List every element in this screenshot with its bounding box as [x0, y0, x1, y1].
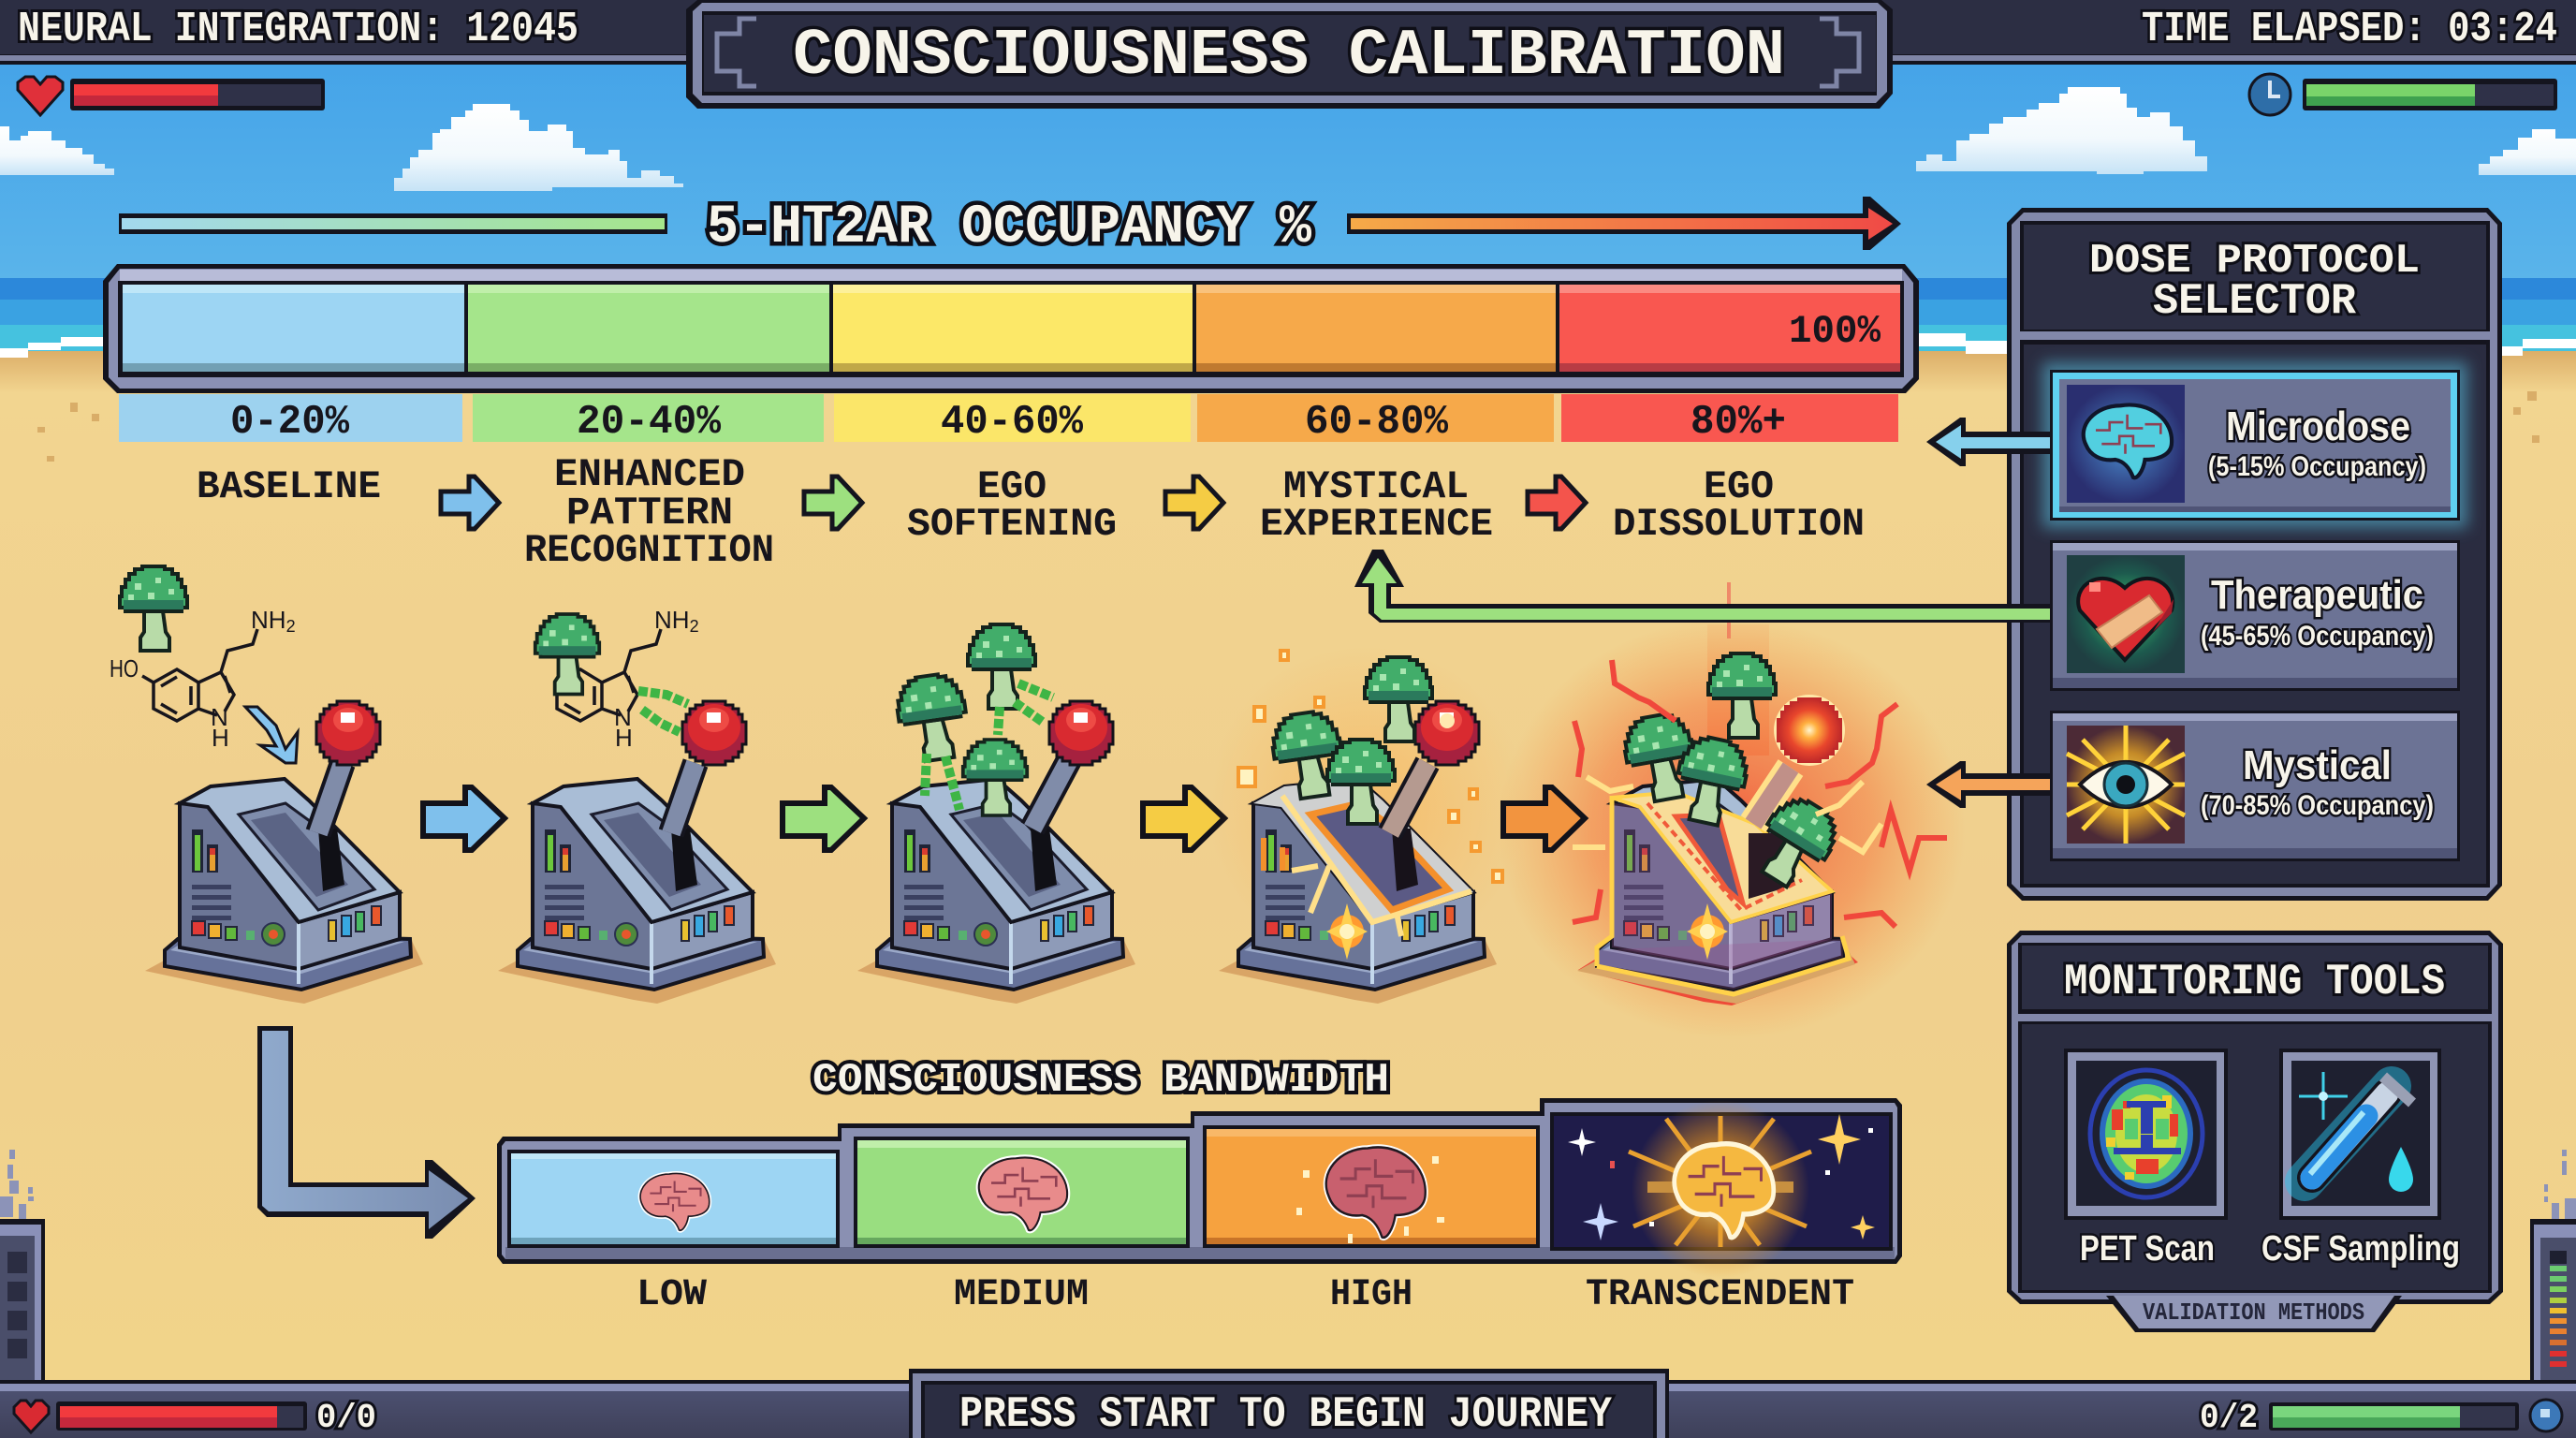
spark: [1687, 903, 1728, 960]
lightning: [1573, 660, 1947, 927]
transcendent: TRANSCENDENT: [1586, 1274, 1854, 1316]
ego softening: SOFTENING: [907, 502, 1117, 547]
bar: [70, 79, 325, 110]
range labels: [119, 394, 1898, 446]
arrow: label yellow: [1165, 477, 1223, 529]
machine: [1219, 779, 1497, 1004]
mushrooms: [1268, 657, 1432, 824]
range 80+: 80%+: [1690, 399, 1786, 446]
mushrooms: [1620, 653, 1847, 896]
mystical experience: MYSTICAL: [1283, 464, 1469, 509]
serotonin with binding: 2: [690, 617, 699, 636]
segment green: [468, 285, 829, 372]
bottom HUD bar: [0, 1380, 2576, 1438]
icon: mushroom: [535, 614, 599, 695]
tile medium: [854, 1137, 1190, 1248]
stage labels: [197, 452, 1865, 573]
score left: 0/0: [316, 1399, 376, 1437]
cloud right edge: [2479, 129, 2576, 175]
press start text: PRESS START TO BEGIN JOURNEY: [959, 1390, 1612, 1438]
spark: [1326, 903, 1368, 960]
range 20-40: [473, 394, 824, 446]
stage 2: enhanced pattern machine: [498, 606, 776, 1004]
panel title: MONITORING TOOLS: [2064, 958, 2445, 1006]
arrow: label blue: [441, 477, 499, 529]
stage 3: ego softening machine: [857, 624, 1135, 1004]
stage 1: baseline machine: [110, 566, 423, 1004]
arrow: stage 2 to 3: [783, 787, 864, 850]
bar: [2303, 79, 2557, 110]
serotonin molecule: 2: [286, 617, 296, 636]
time bar top-right: [2249, 74, 2557, 115]
serotonin molecule: N: [211, 703, 228, 731]
neural integration score: NEURAL INTEGRATION: 12045: [18, 6, 578, 53]
score right: 0/2: [2200, 1399, 2258, 1437]
floating sparks: [1238, 651, 1502, 882]
label: PET Scan: [2080, 1229, 2215, 1269]
serotonin with binding: H: [615, 724, 633, 752]
button: therapeutic: [2050, 540, 2460, 691]
icon: orb: [2530, 1400, 2562, 1431]
range 40-60: [834, 394, 1191, 446]
machine: [145, 779, 423, 1004]
segment blue: [123, 285, 464, 372]
range 0-20: [119, 394, 462, 446]
icon: cyan brain: [2067, 385, 2185, 503]
lever: [1753, 695, 1845, 824]
tile high: [1203, 1125, 1540, 1248]
panel title: [2089, 238, 2420, 326]
icon: test tube: [2299, 1072, 2413, 1192]
enhanced pattern recognition: RECOGNITION: [524, 528, 774, 573]
arrow: curved blue: [245, 707, 298, 763]
high: HIGH: [1330, 1274, 1412, 1316]
icon: medium brain: [979, 1157, 1067, 1230]
serotonin molecule: NH: [251, 606, 286, 634]
arrow: stage 4 to 5: [1503, 787, 1585, 850]
arrow: mystical to occupancy: [1926, 761, 2050, 808]
icon: radiant eye: [2067, 726, 2185, 844]
label: Therapeutic: [2211, 572, 2423, 618]
arrow: stage 1 to 2: [423, 787, 505, 850]
occupancy axis: [119, 197, 1901, 258]
lever: [1390, 701, 1479, 833]
cloud right main: [1916, 87, 2207, 174]
validation tab: VALIDATION METHODS: [2143, 1299, 2364, 1327]
label: [2201, 572, 2434, 652]
low: LOW: [637, 1274, 707, 1316]
serotonin with binding: NH: [654, 606, 690, 634]
button: mystical: [2050, 711, 2460, 861]
bandwidth labels: [637, 1274, 1854, 1316]
ego softening: [907, 464, 1117, 547]
lever: [316, 701, 380, 833]
serotonin molecule: H: [212, 724, 229, 752]
lever: [671, 701, 746, 833]
tile low: [507, 1150, 840, 1248]
machine: [857, 779, 1135, 1004]
mystical experience: EXPERIENCE: [1260, 502, 1493, 547]
medium: MEDIUM: [954, 1274, 1089, 1316]
consciousness bandwidth title: CONSCIOUSNESS BANDWIDTH: [812, 1057, 1389, 1104]
tool: PET scan: [2064, 1049, 2228, 1269]
arrow: label green: [804, 477, 862, 529]
icon: radiant brain: [1629, 1100, 1811, 1278]
left side device: [0, 1150, 45, 1382]
baseline: BASELINE: [197, 464, 381, 509]
axis title: 5-HT2AR OCCUPANCY %: [707, 198, 1311, 258]
range 40-60: 40-60%: [941, 399, 1084, 446]
ego softening: EGO: [977, 464, 1046, 509]
serotonin molecule: [110, 606, 296, 752]
range 60-80: [1197, 394, 1554, 446]
energy overlay: [1253, 779, 1473, 936]
icon: mushroom: [120, 566, 187, 651]
label: CSF Sampling: [2261, 1229, 2460, 1269]
title panel: [686, 0, 1893, 109]
ego dissolution: EGO: [1704, 464, 1774, 509]
100 percent label: 100%: [1789, 309, 1881, 354]
serotonin with binding: [557, 606, 699, 752]
cloud left main: [394, 104, 683, 191]
icon: large brain: [1326, 1147, 1426, 1238]
panel title: DOSE PROTOCOL: [2089, 238, 2420, 285]
button: microdose: [2042, 362, 2467, 528]
mushrooms: [893, 624, 1035, 815]
bandwidth stepped meter: [497, 1098, 1902, 1278]
health bar top-left: [18, 77, 325, 115]
icon: bandaged heart: [2067, 555, 2185, 673]
arrow: label red: [1528, 477, 1586, 529]
arrow: machine to bandwidth: [257, 1026, 476, 1239]
range 0-20: 0-20%: [230, 399, 350, 446]
enhanced pattern recognition: [524, 452, 774, 573]
label: [2201, 742, 2434, 821]
icon: small brain: [640, 1173, 710, 1230]
press start panel: [909, 1369, 1669, 1438]
arrow: microdose to occupancy: [1926, 418, 2050, 466]
background: sea and beach: [0, 278, 2576, 1386]
dose protocol selector panel: [2007, 208, 2502, 901]
segment orange: [1196, 285, 1556, 372]
axis right arrow: [1347, 197, 1901, 250]
icon: heart: [14, 1401, 49, 1432]
stage 5: ego dissolution machine: [1573, 653, 1947, 1005]
segment red: [1559, 285, 1900, 372]
title text: CONSCIOUSNESS CALIBRATION: [793, 20, 1785, 94]
panel title: SELECTOR: [2153, 277, 2356, 326]
enhanced pattern recognition: ENHANCED: [554, 452, 745, 497]
serotonin with binding: N: [614, 703, 632, 731]
tile transcendent: [1550, 1100, 1893, 1278]
green binding chains: [925, 683, 1053, 810]
health bar: [56, 1401, 307, 1431]
right side device: [2530, 1150, 2576, 1382]
occupancy gauge: [103, 264, 1919, 393]
green binding chain: [638, 691, 688, 732]
validation tab: [2106, 1296, 2402, 1332]
machine: [498, 779, 776, 1004]
label: Microdose: [2226, 404, 2410, 449]
icon: PET brain: [2090, 1070, 2203, 1197]
serotonin molecule: HO: [110, 654, 139, 682]
label: Mystical: [2243, 742, 2392, 788]
level meter: [2550, 1251, 2567, 1367]
progress bar: [2269, 1402, 2519, 1431]
mystical experience: [1260, 464, 1493, 547]
range 60-80: 60-80%: [1305, 399, 1449, 446]
label: [2208, 404, 2426, 482]
tool: CSF sampling: [2261, 1049, 2460, 1269]
ego dissolution: DISSOLUTION: [1613, 502, 1865, 547]
axis left bar: [119, 213, 667, 234]
cloud left edge: [0, 126, 114, 175]
stars: [1568, 1114, 1875, 1240]
icon: clock: [2249, 74, 2291, 115]
label: (5-15% Occupancy): [2208, 451, 2426, 482]
segment yellow: [833, 285, 1193, 372]
label: (70-85% Occupancy): [2201, 790, 2434, 821]
range 80+: [1561, 394, 1898, 446]
arrow: therapeutic to mystical experience: [1354, 550, 2050, 623]
top HUD bar: [0, 0, 2576, 65]
label: (45-65% Occupancy): [2201, 621, 2434, 652]
ego dissolution: [1613, 464, 1865, 547]
machine: [1577, 779, 1858, 1005]
icon: heart: [18, 77, 63, 115]
monitoring tools panel: [2007, 931, 2503, 1332]
stage 5 glow and beam: [1498, 582, 1966, 1039]
enhanced pattern recognition: PATTERN: [566, 491, 733, 536]
lever: [1032, 701, 1113, 829]
range 20-40: 20-40%: [577, 399, 722, 446]
stage 4: mystical machine: [1208, 646, 1526, 1004]
background: sky: [0, 0, 2576, 281]
arrow: stage 3 to 4: [1143, 787, 1224, 850]
